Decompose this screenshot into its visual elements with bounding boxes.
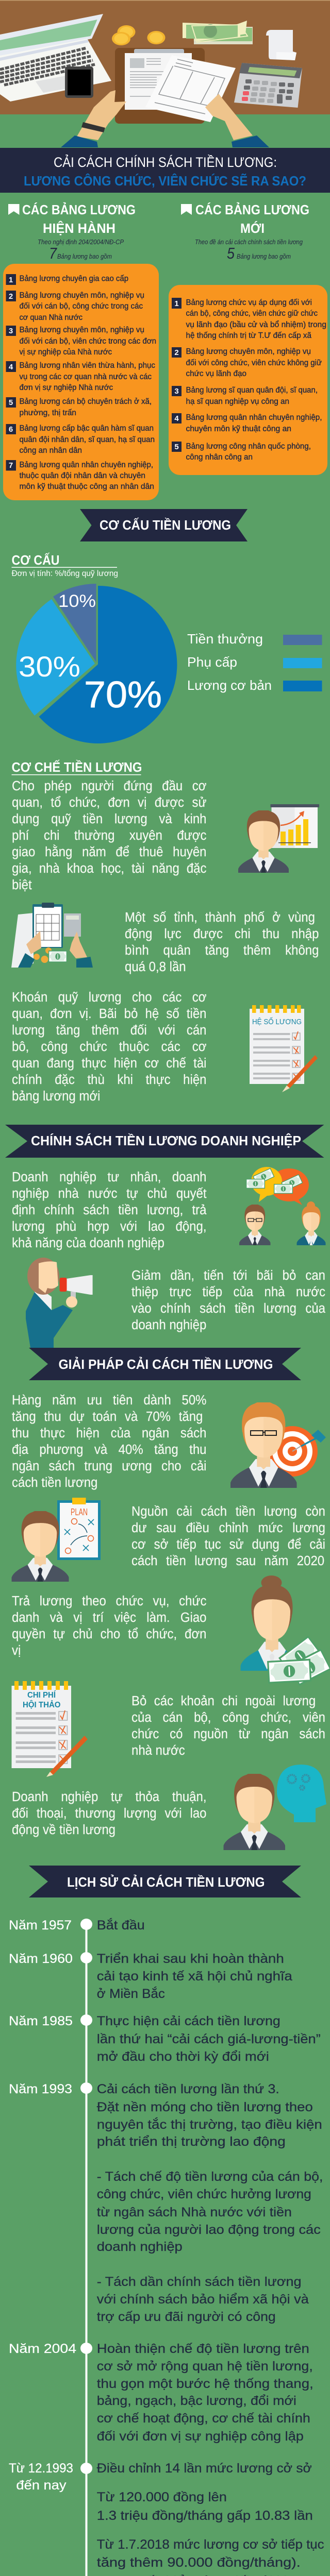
ribbon heading: enterprise salary policy: CHÍNH SÁCH TIỀN LƯƠNG DOANH NGHIỆP (31, 1133, 301, 1148)
timeline: reform history (9, 1918, 327, 2576)
panel: current salary tables list: môn kỹ thuật thuộc công an nhân dân (20, 482, 154, 491)
text block: solution 4: chức có nguồn từ ngân sách (131, 1727, 325, 1741)
panel: new salary tables list: 3 (174, 387, 179, 396)
timeline entry: December 1993 to present: Điều chỉnh 14 lần mức lương cở sở (97, 2461, 312, 2476)
heading: new salary tables: MỚI (240, 221, 265, 236)
ribbon heading: salary structure (80, 509, 248, 541)
icon: receipt (266, 30, 296, 60)
text block: salary mechanism paragraph 3: quan, đơn vị. Bãi bỏ hệ số tiền (11, 1007, 206, 1021)
timeline entry: 1960 (9, 1952, 292, 2001)
timeline entry: 1993: từ ngân sách Nhà nước với tiền (97, 2205, 292, 2219)
text block: salary mechanism paragraph 2: Một số tỉnh, thành phố ở vùng (125, 910, 315, 925)
panel: current salary tables list: quân đội nhân dân, sĩ quan, hạ sĩ quan (20, 435, 155, 444)
text block: enterprise policy paragraph 2 (131, 1268, 326, 1332)
text block: solution 4: Bỏ các khoản chi ngoài lương (131, 1694, 316, 1708)
timeline entry: December 1993 to present (9, 2461, 327, 2576)
icon: left hand with watch (61, 90, 126, 147)
timeline entry: 1957 (9, 1918, 145, 1933)
timeline entry: 2004: Năm 2004 (9, 2342, 76, 2356)
icon: seminar cost notepad (11, 1681, 88, 1777)
panel: new salary tables list: Bảng lương chức vụ áp dụng đối với (186, 298, 312, 307)
text block: solution 1: địa phương và 40% tăng thu (11, 1443, 206, 1457)
panel: new salary tables list (169, 285, 327, 475)
text block: salary mechanism paragraph 3: lương tăng thêm đối với cán (11, 1023, 206, 1038)
text block: enterprise policy paragraph 1: định chính sách tiền lương, trả (11, 1203, 206, 1217)
text block: salary mechanism paragraph 1: Cho phép người đứng đầu cơ (11, 779, 206, 793)
text block: solution 3: danh và vị trí việc làm. Giao (11, 1611, 206, 1625)
panel: current salary tables list: 6 (9, 425, 13, 434)
panel: current salary tables list: cơ quan Nhà nước (20, 313, 82, 322)
text block: solution 4 (131, 1694, 325, 1758)
timeline entry: December 1993 to present: 1.3 triệu đồng/tháng gấp 10.83 lần (97, 2509, 313, 2523)
text block: solution 2: cơ sở tiếp tục sử dụng để cải (131, 1537, 325, 1552)
timeline entry: 1960: ở Miền Bắc (97, 1986, 165, 2001)
text block: enterprise policy paragraph 1: nghiệp nhà nước tự chủ quyết (11, 1187, 206, 1201)
text block: enterprise policy paragraph 2: vào chính sách tiền lương của (131, 1301, 325, 1316)
text block: solution 1: ngân sách trung ương cho cải (11, 1459, 206, 1473)
pie chart: salary structure: 10% (58, 591, 96, 611)
text block: solution 3: Trả lương theo chức vụ, chức (11, 1594, 206, 1608)
timeline entry: 1993: nguyên tắc thị trường, tạo điều kiện (97, 2117, 322, 2132)
timeline entry: 1993: công chức, viên chức hưởng lương (97, 2187, 311, 2201)
panel: current salary tables list: đối với cán bộ, công chức trong các (20, 302, 143, 311)
text block: salary mechanism paragraph 1: giao hằng năm để thuê huyên (11, 845, 206, 859)
heading: current salary tables: Bảng lương bao gồm (57, 252, 112, 260)
icon: clipboard with documents (115, 48, 236, 124)
heading: current salary tables: Theo nghị định 204/2004/NĐ-CP (38, 238, 124, 246)
panel: current salary tables list: 1 (9, 276, 13, 284)
panel: current salary tables list: vị sự nghiệp của Nhà nước (20, 348, 112, 357)
text block: solution 4: của cán bộ, công chức, viên (131, 1710, 325, 1725)
text block: salary mechanism paragraph 3 (11, 990, 206, 1104)
panel: current salary tables list: công an nhân dân (20, 446, 82, 455)
text block: salary mechanism paragraph 3: chính đặc thù khi thực hiện (11, 1073, 206, 1087)
text block: solution 5: đối thoại, thương lượng với lao (11, 1806, 206, 1821)
text block: solution 5: Doanh nghiệp tự thỏa thuận, (11, 1790, 206, 1804)
timeline entry: 1985: mở đầu cho thời kỳ đổi mới (97, 2049, 269, 2064)
panel: new salary tables list: 4 (174, 414, 179, 423)
panel: new salary tables list: hệ thống chính trị từ T.Ư đến cấp xã (186, 331, 311, 340)
ribbon heading: reform solutions (29, 1348, 301, 1380)
panel: new salary tables list: 5 (174, 443, 179, 451)
icon: man with growth chart (238, 804, 319, 873)
panel: current salary tables list: đơn vị sự nghiệp Nhà nước (20, 383, 113, 392)
panel: current salary tables list (3, 264, 159, 500)
panel: new salary tables list: 1 (174, 299, 179, 308)
icon: right hand (205, 94, 269, 147)
heading: new salary tables: 5 (227, 244, 235, 262)
panel: current salary tables list: đối với cán bộ, viên chức trong các đơn (20, 337, 156, 346)
panel: new salary tables list: Bảng lương quân nhân chuyên nghiệp, (186, 413, 322, 422)
panel: new salary tables list: Bảng lương chuyên môn, nghiệp vụ (186, 347, 311, 356)
timeline entry: December 1993 to present: Từ 12.1993 (9, 2461, 73, 2476)
text block: enterprise policy paragraph 1 (11, 1170, 207, 1250)
pie chart: salary structure (16, 584, 177, 743)
timeline entry: 1993: trợ cấp ưu đãi người có công (97, 2310, 276, 2324)
heading: current salary tables (8, 202, 136, 262)
panel: new salary tables list: 2 (174, 348, 179, 357)
ribbon heading: reform history (29, 1866, 301, 1897)
icon: salary coefficient notepad (250, 1005, 318, 1092)
panel: new salary tables list: đối với công chức, viên chức không giữ (186, 359, 322, 367)
ribbon heading: reform solutions: GIẢI PHÁP CẢI CÁCH TIỀN LƯƠNG (59, 1357, 273, 1372)
timeline entry: 1985: lần thứ hai “cải cách giá-lương-tiền” (97, 2032, 321, 2046)
text block: enterprise policy paragraph 1: khả năng của doanh nghiệp (11, 1236, 164, 1250)
timeline entry: 1960: cải tạo kinh tế xã hội chủ nghĩa (97, 1969, 292, 1984)
text block: salary mechanism paragraph 2: bình quân tăng thêm không (125, 943, 319, 958)
text block: solution 1: Hàng năm ưu tiên dành 50% (11, 1393, 206, 1408)
timeline entry: 2004 (9, 2342, 314, 2444)
timeline entry: 1993: Năm 1993 (9, 2082, 72, 2096)
timeline entry: 1985: Năm 1985 (9, 2014, 73, 2028)
icon: laptop (0, 14, 111, 101)
subheading: structure: Đơn vị tính: %/tổng quỹ lương (11, 569, 118, 578)
text block: solution 2: cách tiền lương sau năm 2020 (131, 1554, 324, 1568)
pie chart: salary structure: 70% (84, 674, 162, 716)
heading: current salary tables: 7 (49, 244, 58, 262)
legend: Phụ cấp (187, 654, 237, 670)
subheading: structure: CƠ CẤU (11, 552, 60, 568)
timeline entry: 2004: đối với đơn vị sự nghiệp công lập (97, 2429, 304, 2444)
panel: current salary tables list: vụ trong các cơ quan nhà nước và các (20, 372, 152, 381)
text block: salary mechanism paragraph 3: quan đang thực hiện cơ chế tài (11, 1056, 206, 1071)
panel: current salary tables list: 3 (9, 327, 13, 335)
title line 1: CẢI CÁCH CHÍNH SÁCH TIỀN LƯƠNG: (54, 155, 277, 170)
text block: solution 5 (11, 1790, 206, 1837)
timeline entry: 1993: phát triển thị trường lao động (97, 2134, 286, 2149)
heading: current salary tables: HIỆN HÀNH (43, 221, 116, 236)
icon: man with gear head (224, 1765, 326, 1850)
icon: salary coefficient notepad: HỆ SỐ LƯƠNG (252, 1017, 302, 1026)
timeline entry: 1993: doanh nghiệp (97, 2240, 183, 2254)
subheading: salary mechanism: CƠ CHẾ TIỀN LƯƠNG (11, 759, 142, 775)
panel: current salary tables list: 7 (9, 461, 13, 470)
text block: solution 1: tăng thu dự toán và 70% tăng (11, 1410, 203, 1424)
text block: salary mechanism paragraph 1: dụng quỹ tiền lương và kinh (11, 812, 206, 826)
panel: new salary tables list: Bảng lương công nhân quốc phòng, (186, 442, 311, 451)
timeline entry: 1960: Năm 1960 (9, 1952, 73, 1966)
heading: current salary tables: CÁC BẢNG LƯƠNG (22, 202, 136, 217)
panel: new salary tables list: hạ sĩ quan nghiệp vụ công an (186, 397, 289, 406)
icon: man with megaphone (26, 1258, 93, 1348)
text block: salary mechanism paragraph 1 (11, 779, 206, 892)
text block: enterprise policy paragraph 1: Doanh nghiệp tư nhân, doanh (11, 1170, 206, 1184)
timeline entry: 1957: Bắt đầu (97, 1918, 145, 1933)
text block: solution 5: động về tiền lương (11, 1823, 116, 1837)
heading: new salary tables: CÁC BẢNG LƯƠNG (195, 202, 309, 217)
timeline entry: 1993: lương của người lao động trong các (97, 2223, 321, 2237)
icon: calculator (234, 63, 302, 108)
panel: new salary tables list: vụ lãnh đạo (bầu cử và bổ nhiệm) trong (186, 320, 326, 329)
text block: solution 1: thu thực hiện của ngân sách (11, 1426, 206, 1440)
timeline entry: 1985: Thực hiện cải cách tiền lương (97, 2014, 280, 2028)
text block: enterprise policy paragraph 2: thiệp trực tiếp của nhà nước (131, 1285, 325, 1299)
legend: Lương cơ bản (187, 677, 272, 693)
timeline entry: December 1993 to present: tăng thêm 90.000 đồng/tháng). (97, 2555, 301, 2570)
text block: salary mechanism paragraph 3: Khoán quỹ lương cho các cơ (11, 990, 206, 1005)
text block: salary mechanism paragraph 2 (125, 910, 319, 974)
text block: solution 3 (11, 1594, 206, 1658)
timeline entry: 2004: thu gọn một bước hệ thống thang, (97, 2377, 314, 2391)
text block: salary mechanism paragraph 3: bảng lương mới (11, 1089, 100, 1104)
panel: current salary tables list: 5 (9, 398, 13, 407)
text block: solution 2 (131, 1504, 325, 1568)
icon: woman with money (240, 1575, 330, 1685)
timeline entry: December 1993 to present: Từ 1.7.2018 mức lương cơ sở tiếp tục (97, 2537, 324, 2552)
text block: salary mechanism paragraph 1: biệt (11, 878, 31, 892)
icon: man with target (230, 1401, 326, 1488)
timeline entry: 1993: Đặt nền móng cho tiền lương theo (97, 2100, 313, 2114)
timeline entry: 1993 (9, 2082, 323, 2324)
timeline entry: 1957: Năm 1957 (9, 1918, 72, 1933)
header illustration: desk with laptop, money, calculator and hands (0, 0, 330, 148)
icon: two people discussing money (239, 1167, 326, 1245)
heading: new salary tables: Bảng lương bao gồm (237, 252, 291, 260)
panel: current salary tables list: Bảng lương cấp bậc quân hàm sĩ quan (20, 424, 154, 433)
panel: current salary tables list: 4 (9, 363, 13, 371)
panel: current salary tables list: Bảng lương chuyên môn, nghiệp vụ (20, 291, 144, 300)
pie chart: salary structure: 30% (19, 650, 80, 683)
text block: salary mechanism paragraph 2: động lực được chi thu nhập (125, 927, 319, 941)
icon: seminar cost notepad: CHI PHÍ (27, 1691, 56, 1700)
panel: current salary tables list: 2 (9, 292, 13, 301)
icon: payroll clipboard with hands and money (11, 903, 93, 968)
panel: new salary tables list: cán bộ, công chức, viên chức giữ chức (186, 309, 318, 318)
title band (0, 148, 330, 193)
timeline entry: 1960: Triển khai sau khi hoàn thành (97, 1952, 284, 1966)
subheading: structure (11, 552, 118, 578)
timeline entry: 2004: Hoàn thiện chế độ tiền lương trên (97, 2342, 309, 2356)
timeline entry: 1993: Cải cách tiền lương lần thứ 3. (97, 2082, 279, 2096)
timeline entry: 1993: - Tách dần chính sách tiền lương (97, 2275, 302, 2289)
text block: solution 3: quyền tự chủ cho tổ chức, đơn (11, 1627, 206, 1641)
icon: coins (112, 25, 165, 45)
ribbon heading: salary structure: CƠ CẤU TIỀN LƯƠNG (100, 517, 231, 533)
timeline entry: December 1993 to present: Từ 120.000 đồng lên (97, 2490, 227, 2504)
heading: new salary tables (181, 202, 309, 262)
icon: man with plan board (11, 1498, 101, 1582)
panel: current salary tables list: thuộc quân đội nhân dân và chuyên (20, 471, 145, 480)
text block: enterprise policy paragraph 2: Giảm dần, tiến tới bãi bỏ can (131, 1268, 325, 1283)
legend: Tiền thưởng (187, 631, 263, 647)
timeline entry: 2004: bảng, ngạch, bậc lương, đổi mới (97, 2394, 296, 2408)
text block: enterprise policy paragraph 1: lương phù hợp với lao động, (11, 1219, 206, 1234)
panel: current salary tables list: Bảng lương quân nhân chuyên nghiệp, (20, 461, 153, 469)
timeline entry: 1985 (9, 2014, 321, 2064)
text block: solution 1 (11, 1393, 206, 1490)
text block: salary mechanism paragraph 1: quan, tổ chức, đơn vị được sử (11, 795, 206, 810)
panel: new salary tables list: chuyên môn kỹ thuật công an (186, 425, 291, 433)
timeline entry: 2004: cơ sở mở rộng quan hệ tiền lương, (97, 2359, 313, 2374)
timeline entry: December 1993 to present: đến nay (16, 2478, 67, 2493)
ribbon heading: enterprise salary policy (5, 1125, 324, 1158)
text block: salary mechanism paragraph 2: quá 0,8 lần (125, 960, 186, 974)
text block: solution 2: dư sau điều chỉnh mức lương (131, 1521, 325, 1535)
icon: phone (65, 66, 93, 98)
icon: man with plan board: PLAN (71, 1507, 88, 1517)
panel: new salary tables list: chức vụ lãnh đạo (186, 369, 246, 378)
panel: current salary tables list: Bảng lương chuyên gia cao cấp (20, 275, 128, 283)
timeline entry: 1993: - Tách chế độ tiền lương của cán bộ, (97, 2170, 323, 2184)
panel: current salary tables list: Bảng lương chuyên môn, nghiệp vụ (20, 326, 144, 334)
text block: enterprise policy paragraph 2: doanh nghiệp (131, 1318, 206, 1332)
text block: solution 1: cách tiền lương (11, 1476, 97, 1490)
panel: current salary tables list: Bảng lương nhân viên thừa hành, phục (20, 361, 155, 370)
panel: new salary tables list: công nhân công an (186, 453, 253, 462)
text block: salary mechanism paragraph 3: bô, công chức thuộc các cơ (11, 1040, 206, 1054)
text block: solution 2: Nguồn cải cách tiền lương còn (131, 1504, 325, 1519)
panel: new salary tables list: Bảng lương sĩ quan quân đội, sĩ quan, (186, 386, 318, 395)
text block: salary mechanism paragraph 1: gia, nhà khoa học, tài năng đặc (11, 861, 206, 876)
ribbon heading: reform history: LỊCH SỬ CẢI CÁCH TIỀN LƯƠNG (67, 1874, 265, 1890)
panel: current salary tables list: phường, thị trấn (20, 409, 76, 417)
title line 2: LƯƠNG CÔNG CHỨC, VIÊN CHỨC SẼ RA SAO? (24, 173, 306, 189)
legend (187, 631, 322, 693)
text block: salary mechanism paragraph 1: phí chi thường xuyên được (11, 828, 206, 843)
panel: current salary tables list: Bảng lương cán bộ chuyên trách ở xã, (20, 397, 152, 406)
heading: new salary tables: Theo đề án cải cách chính sách tiền lương (195, 238, 303, 246)
icon: seminar cost notepad: HỘI THẢO (23, 1700, 61, 1709)
text block: solution 4: nhà nước (131, 1743, 185, 1758)
text block: solution 3: vị (11, 1643, 21, 1658)
timeline entry: 1993: với chính sách bảo hiểm xã hội và (97, 2292, 309, 2307)
timeline entry: 2004: cơ chế hoạt động, cơ chế tài chính (97, 2411, 310, 2426)
icon: banknotes (183, 21, 253, 44)
